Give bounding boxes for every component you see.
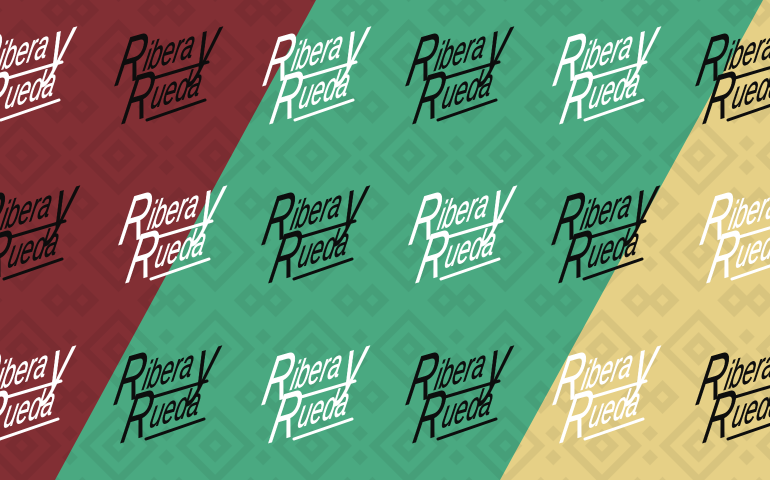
logo: row 3 column 1, white: ueda (0, 379, 60, 438)
logo: row 1 column 3, white: R (265, 55, 310, 140)
logo: row 2 column 2, white: R (121, 214, 166, 299)
logo: row 1 column 3, white (256, 0, 379, 140)
logo: row 3 column 2, black: R (109, 336, 154, 421)
logo: row 2 column 4, white: ibera (434, 181, 494, 240)
logo: row 1 column 2, black: ueda (147, 60, 207, 119)
logo: row 2 column 6, white: R (695, 176, 740, 261)
logo: row 3 column 5, white: y (624, 318, 668, 407)
logo: row 2 column 4, white: R (411, 214, 456, 299)
logo: row 2 column 2, white (112, 154, 235, 299)
logo: row 2 column 6, white (693, 154, 770, 299)
logo: row 3 column 3, white: y (333, 318, 377, 407)
logo: row 2 column 3, black: ibera (287, 181, 347, 240)
logo: row 2 column 4, white (402, 154, 525, 299)
logo: row 2 column 5, black: R (547, 176, 592, 261)
logo: row 3 column 4, black: y (477, 318, 521, 407)
logo: row 1 column 3, white: ueda (295, 60, 355, 119)
logo: row 1 column 4, black (399, 0, 522, 140)
logo: row 2 column 1, black: y (43, 158, 87, 247)
logo: row 3 column 1, white (0, 314, 84, 459)
logo: row 1 column 2, black: ibera (140, 22, 200, 81)
logo: row 3 column 5, white: R (548, 336, 593, 421)
logo: row 1 column 6, black: R (691, 17, 736, 102)
panel: yellow diagonal band (500, 0, 770, 480)
logo: row 3 column 2, black: y (185, 318, 229, 407)
logo: row 2 column 3, black: R (257, 176, 302, 261)
logo: row 1 column 3, white: ibera (288, 22, 348, 81)
logo: row 1 column 6, black: R (698, 55, 743, 140)
logo: row 2 column 2, white: R (114, 176, 159, 261)
logo: row 1 column 5, white (546, 0, 669, 140)
logo: row 2 column 3, black: R (264, 214, 309, 299)
logo: row 1 column 1, white: y (40, 0, 84, 88)
logo: row 2 column 1, black: ueda (4, 219, 64, 278)
logo: row 2 column 5, black (545, 154, 668, 299)
logo: row 2 column 2, white: ueda (151, 219, 211, 278)
logo: row 3 column 2, black: ibera (139, 341, 199, 400)
logo: row 1 column 5, white: R (555, 55, 600, 140)
logo: row 3 column 4, black: ueda (438, 379, 498, 438)
logo: row 1 column 5, white: ueda (585, 60, 645, 119)
logo: row 1 column 4, black: y (477, 0, 521, 88)
logo: row 2 column 2, white: y (190, 158, 234, 247)
logo: row 1 column 5, white: y (624, 0, 668, 88)
logo: row 3 column 6, black (689, 314, 770, 459)
logo: row 2 column 3, black (255, 154, 378, 299)
logo: row 3 column 2, black (107, 314, 230, 459)
logo: row 1 column 6, black (689, 0, 770, 140)
logo: row 1 column 3, white: y (334, 0, 378, 88)
logo: row 2 column 1, black (0, 154, 88, 299)
logo: row 3 column 3, white: R (264, 374, 309, 459)
logo: row 1 column 4, black: ibera (431, 22, 491, 81)
logo: row 2 column 4, white: ueda (441, 219, 501, 278)
logo: row 1 column 3, white: R (258, 17, 303, 102)
logo: row 1 column 5, white: ibera (578, 22, 638, 81)
logo: row 3 column 5, white: ueda (585, 379, 645, 438)
logo: row 3 column 6, black: R (698, 374, 743, 459)
logo: row 3 column 4, black: R (401, 336, 446, 421)
logo: row 3 column 4, black: R (408, 374, 453, 459)
logo: row 2 column 4, white: R (404, 176, 449, 261)
logo: row 2 column 5, black: R (554, 214, 599, 299)
logo: row 3 column 3, white (255, 314, 378, 459)
logo: row 3 column 2, black: ueda (146, 379, 206, 438)
logo: row 1 column 2, black: y (186, 0, 230, 88)
logo: row 2 column 4, white: y (480, 158, 524, 247)
logo: row 1 column 2, black: R (117, 55, 162, 140)
logo: row 1 column 2, black (108, 0, 231, 140)
logo: row 3 column 5, white: ibera (578, 341, 638, 400)
logo: row 2 column 5, black: ibera (577, 181, 637, 240)
logo: row 3 column 3, white: R (257, 336, 302, 421)
logo: row 3 column 6, black: R (691, 336, 736, 421)
logo: row 3 column 1, white: y (39, 318, 83, 407)
logo: row 3 column 3, white: ibera (287, 341, 347, 400)
logo: row 1 column 1, white (0, 0, 85, 140)
logo: row 3 column 2, black: R (116, 374, 161, 459)
logo: row 3 column 3, white: ueda (294, 379, 354, 438)
logo: row 3 column 5, white (546, 314, 669, 459)
logo: row 2 column 2, white: ibera (144, 181, 204, 240)
logo: row 2 column 5, black: y (623, 158, 667, 247)
logo: row 1 column 5, white: R (548, 17, 593, 102)
logo: row 1 column 4, black: R (401, 17, 446, 102)
logo: row 1 column 1, white: ueda (1, 60, 61, 119)
logo: row 3 column 5, white: R (555, 374, 600, 459)
logo: row 1 column 4, black: ueda (438, 60, 498, 119)
logo: row 2 column 6, white: R (702, 214, 747, 299)
logo: row 1 column 4, black: R (408, 55, 453, 140)
logo: row 2 column 3, black: y (333, 158, 377, 247)
logo: row 3 column 4, black: ibera (431, 341, 491, 400)
logo: row 3 column 4, black (399, 314, 522, 459)
logo: row 2 column 3, black: ueda (294, 219, 354, 278)
logo: row 1 column 2, black: R (110, 17, 155, 102)
logo: row 2 column 5, black: ueda (584, 219, 644, 278)
panel: dark red diagonal band (0, 0, 316, 480)
